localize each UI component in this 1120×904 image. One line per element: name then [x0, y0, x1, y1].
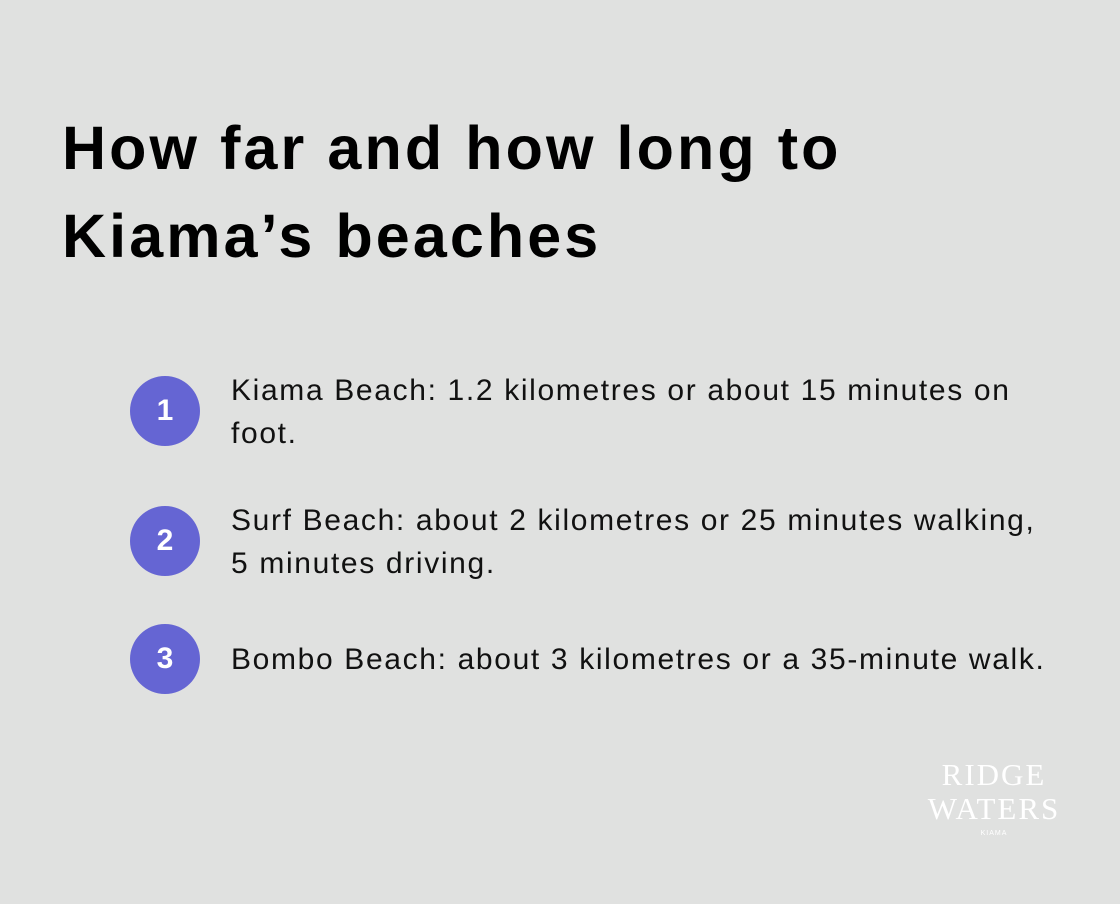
text 3: Bombo Beach: about 3 kilometres or a 35-minute walk. [231, 643, 1046, 676]
item 3 [130, 624, 1046, 694]
icon: number 3 [130, 624, 200, 694]
text 1: foot. [231, 417, 298, 450]
text 2 [231, 504, 1035, 580]
text 2: 5 minutes driving. [231, 547, 496, 580]
item 2 [130, 504, 1035, 580]
icon: number 3: 3 [157, 642, 173, 675]
text 1 [231, 374, 1011, 450]
logo: RIDGE [942, 757, 1046, 792]
icon: number 2 [130, 506, 200, 576]
logo: KIAMA [981, 830, 1007, 837]
title [62, 114, 842, 270]
icon: number 1: 1 [157, 394, 173, 427]
text 2: Surf Beach: about 2 kilometres or 25 minutes walking, [231, 504, 1035, 537]
logo: WATERS [928, 791, 1060, 826]
title: How far and how long to [62, 114, 842, 182]
title: Kiama’s beaches [62, 202, 601, 270]
icon: number 2: 2 [157, 524, 173, 557]
logo [928, 757, 1060, 837]
item 1 [130, 374, 1011, 450]
icon: number 1 [130, 376, 200, 446]
text 1: Kiama Beach: 1.2 kilometres or about 15 minutes on [231, 374, 1011, 407]
